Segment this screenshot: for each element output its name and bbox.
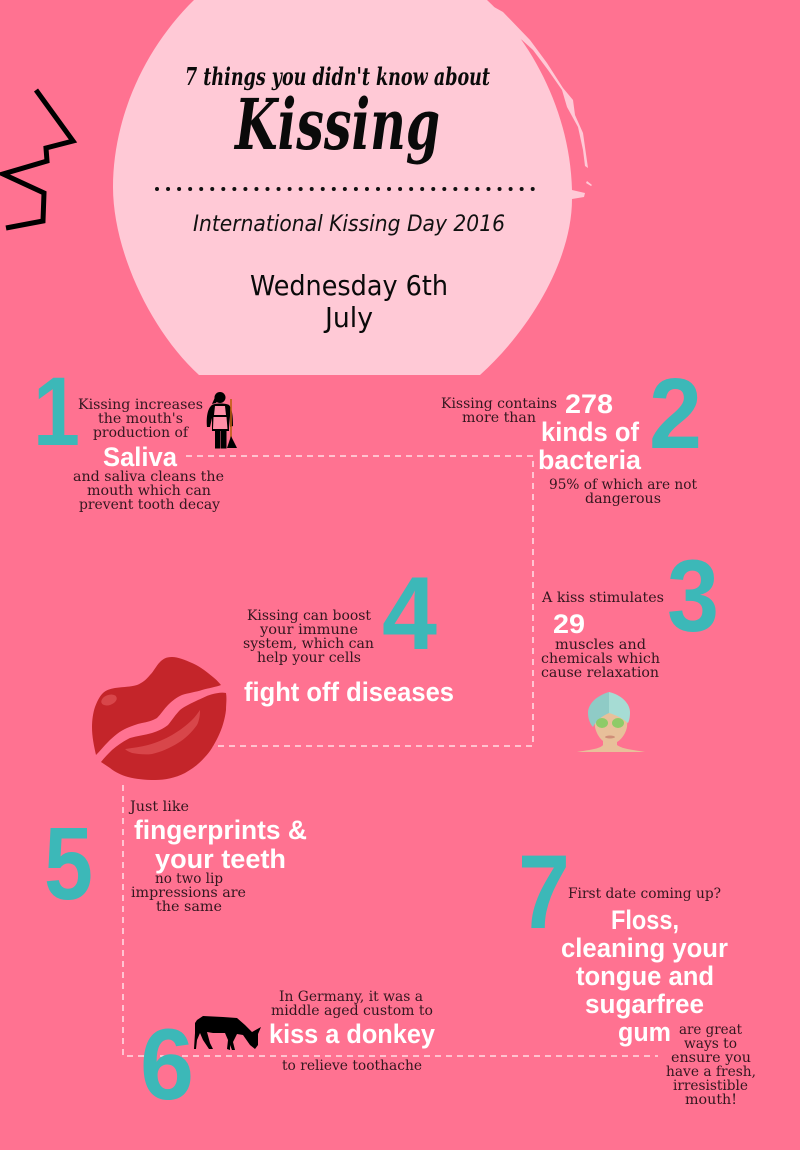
date: Wednesday 6th: [250, 269, 448, 302]
icon: spa face with cucumber eyes: [577, 692, 645, 752]
fact 6: middle aged custom to: [271, 1003, 433, 1019]
fact 4: fight off diseases: [244, 677, 454, 707]
fact 1: mouth which can: [87, 483, 211, 499]
number 5: 5: [44, 806, 93, 921]
fact 1: Saliva: [103, 442, 178, 472]
fact 7: [518, 834, 756, 1108]
fact 1: [33, 357, 237, 513]
date: [250, 269, 448, 334]
main title: Kissing: [234, 83, 440, 166]
icon: cleaning maid: [207, 392, 237, 448]
date: July: [323, 301, 373, 334]
fact 2: 95% of which are not: [549, 477, 697, 493]
fact 3: cause relaxation: [541, 665, 659, 681]
fact 4: Kissing can boost: [247, 608, 371, 624]
fact 5: [44, 799, 307, 921]
fact 2: more than: [462, 410, 536, 426]
fact 6: to relieve toothache: [282, 1058, 422, 1074]
fact 2: [441, 358, 702, 507]
fact 5: Just like: [128, 799, 189, 815]
number 7: 7: [518, 834, 570, 951]
fact 7: are great: [679, 1022, 742, 1038]
icon: donkey: [194, 1016, 261, 1050]
subtitle: 7 things you didn't know about: [185, 62, 490, 91]
fact 3: [541, 539, 719, 752]
fact 7: First date coming up?: [568, 886, 721, 902]
fact 7: sugarfree: [585, 989, 704, 1019]
fact 3: 29: [553, 609, 585, 639]
fact 6: kiss a donkey: [269, 1019, 435, 1049]
fact 3: muscles and: [555, 637, 646, 653]
fact 7: irresistible: [673, 1078, 748, 1094]
fact 4: [243, 556, 454, 707]
icon: red lips: [92, 657, 226, 780]
fact 6: [140, 989, 435, 1121]
fact 7: mouth!: [685, 1092, 737, 1108]
fact 5: the same: [156, 899, 222, 915]
fact 1: and saliva cleans the: [73, 469, 224, 485]
fact 2: dangerous: [585, 491, 661, 507]
fact 5: fingerprints &: [134, 815, 307, 845]
fact 2: 278: [565, 389, 613, 419]
fact 3: A kiss stimulates: [541, 590, 664, 606]
fact 7: tongue and: [576, 961, 714, 991]
fact 1: production of: [93, 425, 190, 441]
fact 4: your immune: [259, 622, 358, 638]
icon: zigzag kiss mark: [3, 90, 73, 228]
number 1: 1: [33, 357, 80, 466]
fact 3: chemicals which: [541, 651, 660, 667]
fact 4: help your cells: [257, 650, 361, 666]
fact 1: the mouth's: [98, 411, 183, 427]
fact 5: impressions are: [131, 885, 246, 901]
fact 1: prevent tooth decay: [79, 497, 220, 513]
fact 2: Kissing contains: [441, 396, 557, 412]
fact 2: bacteria: [538, 445, 642, 475]
fact 1: Kissing increases: [78, 397, 203, 413]
fact 5: no two lip: [155, 871, 223, 887]
fact 7: ways to: [684, 1036, 737, 1052]
fact 7: cleaning your: [561, 933, 728, 963]
number 2: 2: [649, 358, 702, 470]
fact 2: kinds of: [541, 417, 640, 447]
fact 7: have a fresh,: [666, 1064, 756, 1080]
fact 4: system, which can: [243, 636, 374, 652]
event name: International Kissing Day 2016: [193, 212, 505, 237]
fact 6: In Germany, it was a: [279, 989, 423, 1005]
fact 7: gum: [618, 1017, 671, 1047]
title block: [157, 62, 534, 334]
fact 7: ensure you: [671, 1050, 751, 1066]
fact 5: your teeth: [155, 844, 286, 874]
header circle: [113, 0, 592, 375]
fact 7: Floss,: [611, 905, 679, 935]
number 4: 4: [382, 556, 437, 672]
number 6: 6: [140, 1009, 194, 1121]
number 3: 3: [667, 539, 719, 653]
